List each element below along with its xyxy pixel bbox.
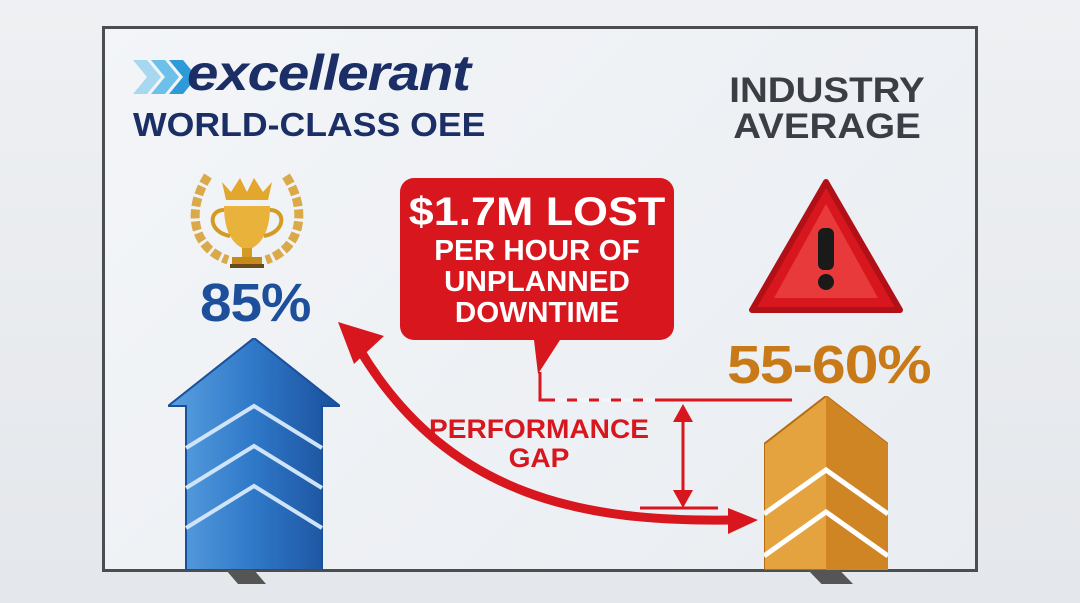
label: performance gap — [429, 414, 649, 473]
callout: $1.7M lost: $1.7M LOST — [409, 190, 665, 234]
icon: warning triangle — [749, 179, 903, 313]
tv stand left — [226, 570, 266, 584]
icon: trophy — [190, 174, 304, 268]
heading: industry average: AVERAGE — [733, 107, 921, 146]
callout: $1.7M lost — [400, 178, 674, 374]
subtitle: world-class oee: WORLD-CLASS OEE — [133, 106, 485, 143]
label: performance gap: GAP — [509, 443, 569, 473]
value: 85%: 85% — [200, 273, 310, 333]
callout: $1.7M lost: UNPLANNED — [444, 266, 630, 298]
gold chevrons — [764, 396, 888, 570]
heading: industry average — [729, 71, 925, 146]
heading: industry average: INDUSTRY — [729, 71, 925, 110]
tv frame — [102, 26, 978, 572]
value: 55-60%: 55-60% — [727, 335, 931, 395]
logo: excellerant: excellerant — [187, 45, 470, 101]
callout: $1.7M lost: PER HOUR OF — [434, 235, 640, 267]
gap lines and arrows — [338, 322, 792, 534]
tv stand right — [808, 570, 853, 584]
label: performance gap: PERFORMANCE — [429, 414, 649, 444]
callout: $1.7M lost: DOWNTIME — [455, 297, 619, 329]
blue up arrow — [168, 338, 340, 570]
